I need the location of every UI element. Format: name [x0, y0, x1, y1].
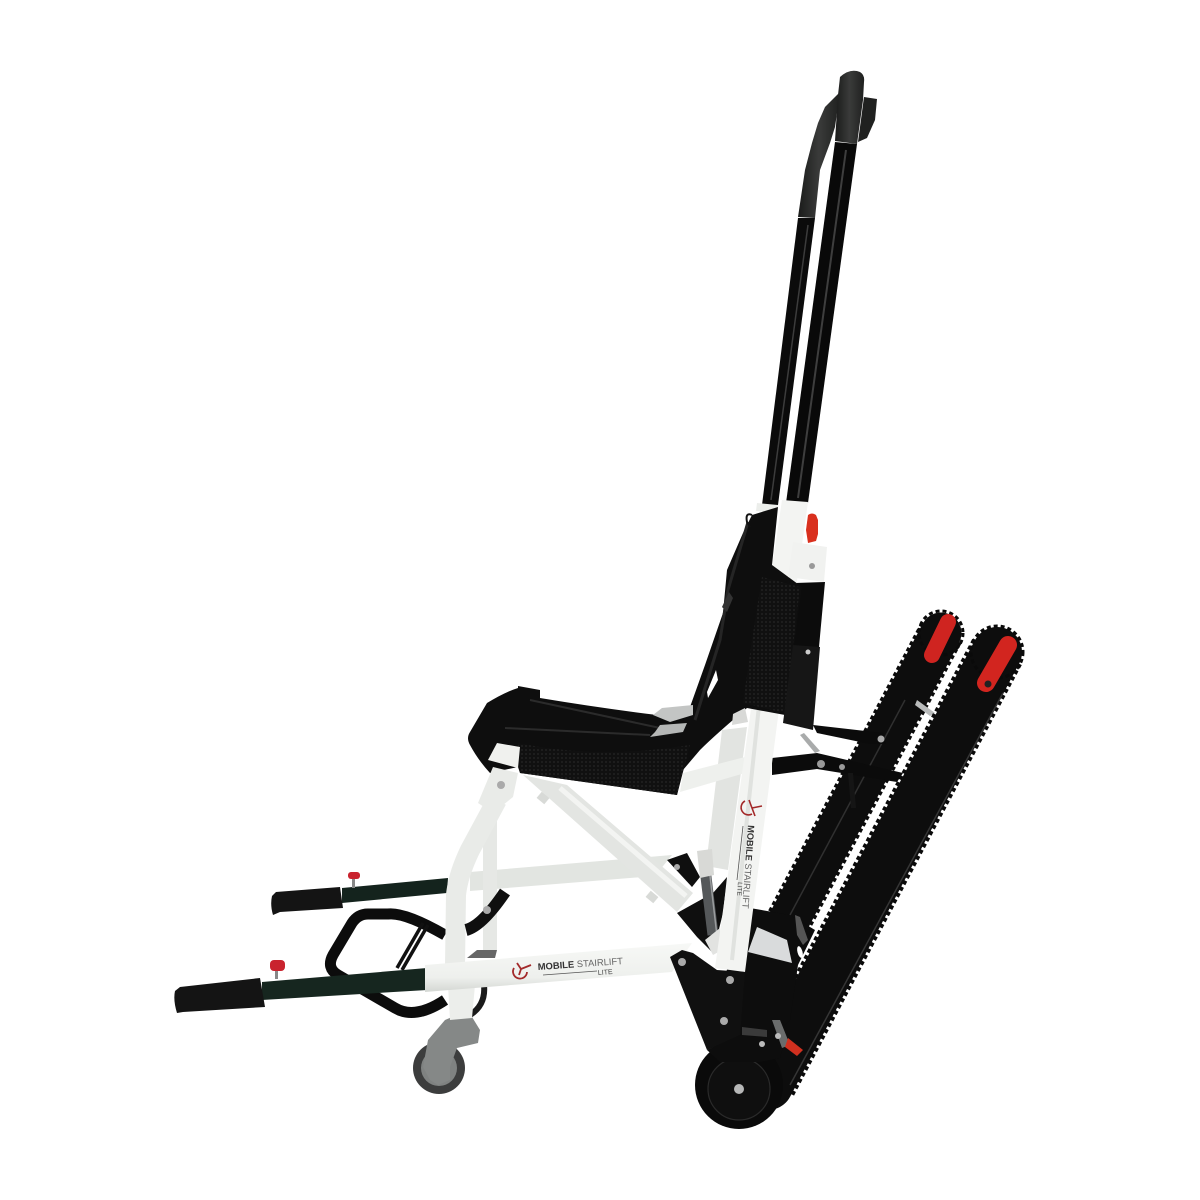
rear pole collar [756, 503, 778, 513]
red brake latch [785, 1038, 803, 1056]
product variant text: lower bar: LITE [598, 969, 613, 977]
bolt on side bracket [806, 650, 810, 654]
chair rear upright [706, 727, 747, 870]
front handle rubber grip [174, 978, 265, 1013]
far side caster [467, 950, 497, 1015]
black folding latch [466, 892, 505, 930]
rear handle pole [762, 218, 815, 505]
front seat tube [488, 743, 520, 768]
rear handle grip [798, 92, 840, 218]
rear track red end cap [932, 622, 948, 655]
lower white frame bar with branding [425, 943, 692, 992]
seat mesh pad [518, 743, 690, 795]
brand text: lower bar: MOBILE STAIRLIFT [537, 955, 623, 972]
large track wheel [695, 1041, 783, 1129]
front handle red pin [275, 970, 278, 979]
caster post [448, 985, 475, 1020]
rear handle rubber grip [271, 887, 343, 915]
seat support crossbar [680, 757, 745, 792]
latch plate [742, 1027, 767, 1037]
rear track [768, 611, 963, 960]
lap strap [505, 700, 660, 735]
metal connecting rod between tracks [915, 700, 935, 716]
lower cross tube [470, 855, 672, 891]
front handle pole [786, 142, 857, 503]
gap between strap and back [707, 670, 718, 698]
motor housing [725, 908, 815, 1045]
harness strap [695, 522, 748, 720]
safety label [748, 927, 792, 963]
diagonal brace [523, 775, 693, 912]
lower buckle [650, 723, 687, 737]
upper buckle [653, 705, 693, 722]
strap loop [747, 514, 752, 527]
bolt on collar [809, 563, 815, 569]
front handle grip [835, 71, 864, 144]
brake lever [759, 1020, 803, 1056]
black footrest frame [330, 914, 445, 1012]
metal lever on housing [795, 915, 808, 945]
front track red end cap [986, 645, 1008, 683]
rear black tube behind upright [785, 582, 825, 647]
front curved frame leg [455, 800, 497, 965]
seat pivot bolt [732, 708, 748, 725]
pivot plate [705, 928, 722, 955]
caster fork [423, 1017, 480, 1085]
small gap at housing [796, 946, 804, 958]
top rear knob [858, 97, 877, 142]
upper collar block [788, 542, 827, 582]
seat back and seat cushion [468, 507, 802, 795]
product variant text: upright: LITE [735, 882, 743, 897]
caster wheel [413, 1017, 480, 1094]
rear handle red pin [352, 878, 355, 888]
track support arms [772, 725, 903, 808]
logo: lower bar [513, 963, 531, 979]
main white upright [715, 500, 808, 972]
front telescopic handle [174, 960, 427, 1013]
brand text: upright: MOBILE STAIRLIFT [740, 825, 756, 909]
seat back mesh panel [743, 577, 800, 713]
front track [768, 626, 1023, 1085]
black triangular side plate [670, 950, 745, 1050]
far side rear leg [483, 815, 497, 950]
hinge plate [478, 767, 518, 813]
logo: upright [741, 800, 762, 816]
red adjustment knob [806, 514, 818, 543]
piston assembly [667, 849, 727, 953]
black side bracket [783, 645, 820, 730]
wheel mount bracket [707, 1035, 785, 1062]
rear telescopic handle [271, 872, 448, 915]
